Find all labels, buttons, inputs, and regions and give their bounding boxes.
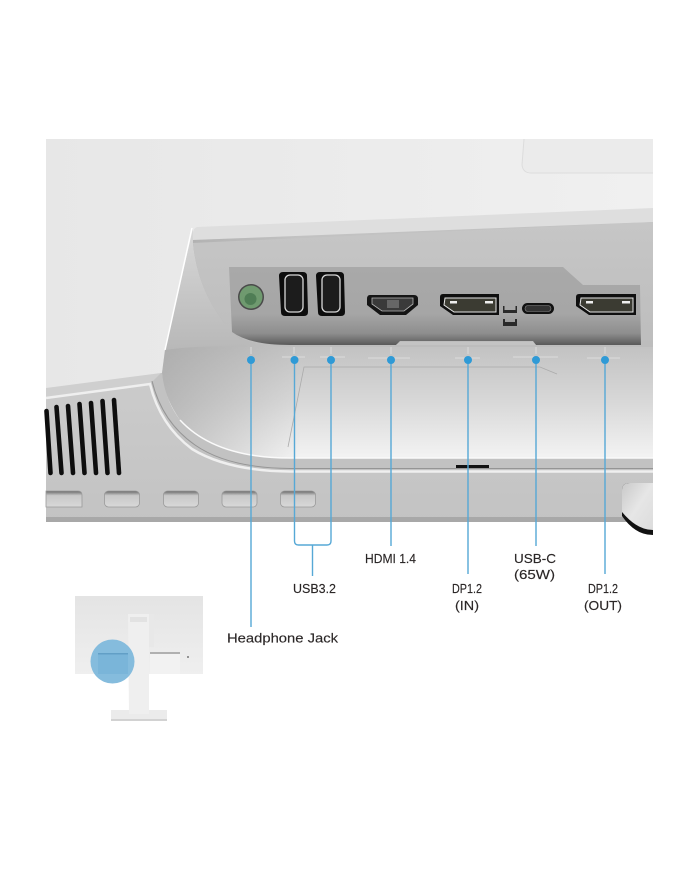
label: DP1.2 (OUT): DP1.2 [588,581,618,596]
label: USB-C (65W): USB-C [514,551,556,566]
icon: DisplayPort in [440,294,499,315]
label: USB-C (65W): (65W) [514,567,555,582]
port recess [150,653,180,674]
callout lines and dots [247,356,609,627]
label: HDMI 1.4: HDMI 1.4 [365,551,416,566]
label: DP1.2 (OUT) [584,581,622,613]
recess floor [162,222,653,458]
label: USB3.2: USB3.2 [293,581,336,596]
label: DP1.2 (IN): DP1.2 [452,581,482,596]
label: DP1.2 (IN): (IN) [455,598,479,613]
faint port markings [251,347,620,358]
recess lip [150,373,653,471]
right stand foot [622,483,653,535]
locator thumbnail: monitor back [75,596,203,721]
monitor panel [75,596,203,674]
left wedge of the recess [165,228,248,350]
label: Headphone Jack: Headphone Jack [227,630,339,646]
neck bracket [128,614,154,647]
label: DP1.2 (IN) [452,581,482,613]
monitor rear photo [46,139,653,535]
recess rear wall [193,222,653,347]
buttons [46,491,316,507]
icon: USB port left [279,272,308,316]
blue highlight circle [90,640,134,684]
stand base [111,710,167,720]
lower body [46,383,653,522]
icon: DisplayPort out [576,294,636,315]
icon: HDMI port [367,295,418,315]
icon: DP/USB-C toggle marks [503,306,517,326]
stand neck [128,614,149,714]
icon: USB-C port [522,303,554,314]
notch [456,465,489,468]
panel tab [396,342,536,345]
shell edge highlight [165,228,192,350]
label: USB-C (65W) [514,551,556,582]
stand mount [522,139,653,173]
icon: USB port right [316,272,345,316]
vents [46,400,119,473]
recess top band [193,208,653,243]
faint recess seams [288,367,557,447]
port panel [229,267,641,345]
icon: headphone jack [238,284,264,310]
bezel band [46,373,163,399]
label: DP1.2 (OUT): (OUT) [584,598,622,613]
bottom strip [46,517,653,522]
upper rear shell [46,139,653,399]
